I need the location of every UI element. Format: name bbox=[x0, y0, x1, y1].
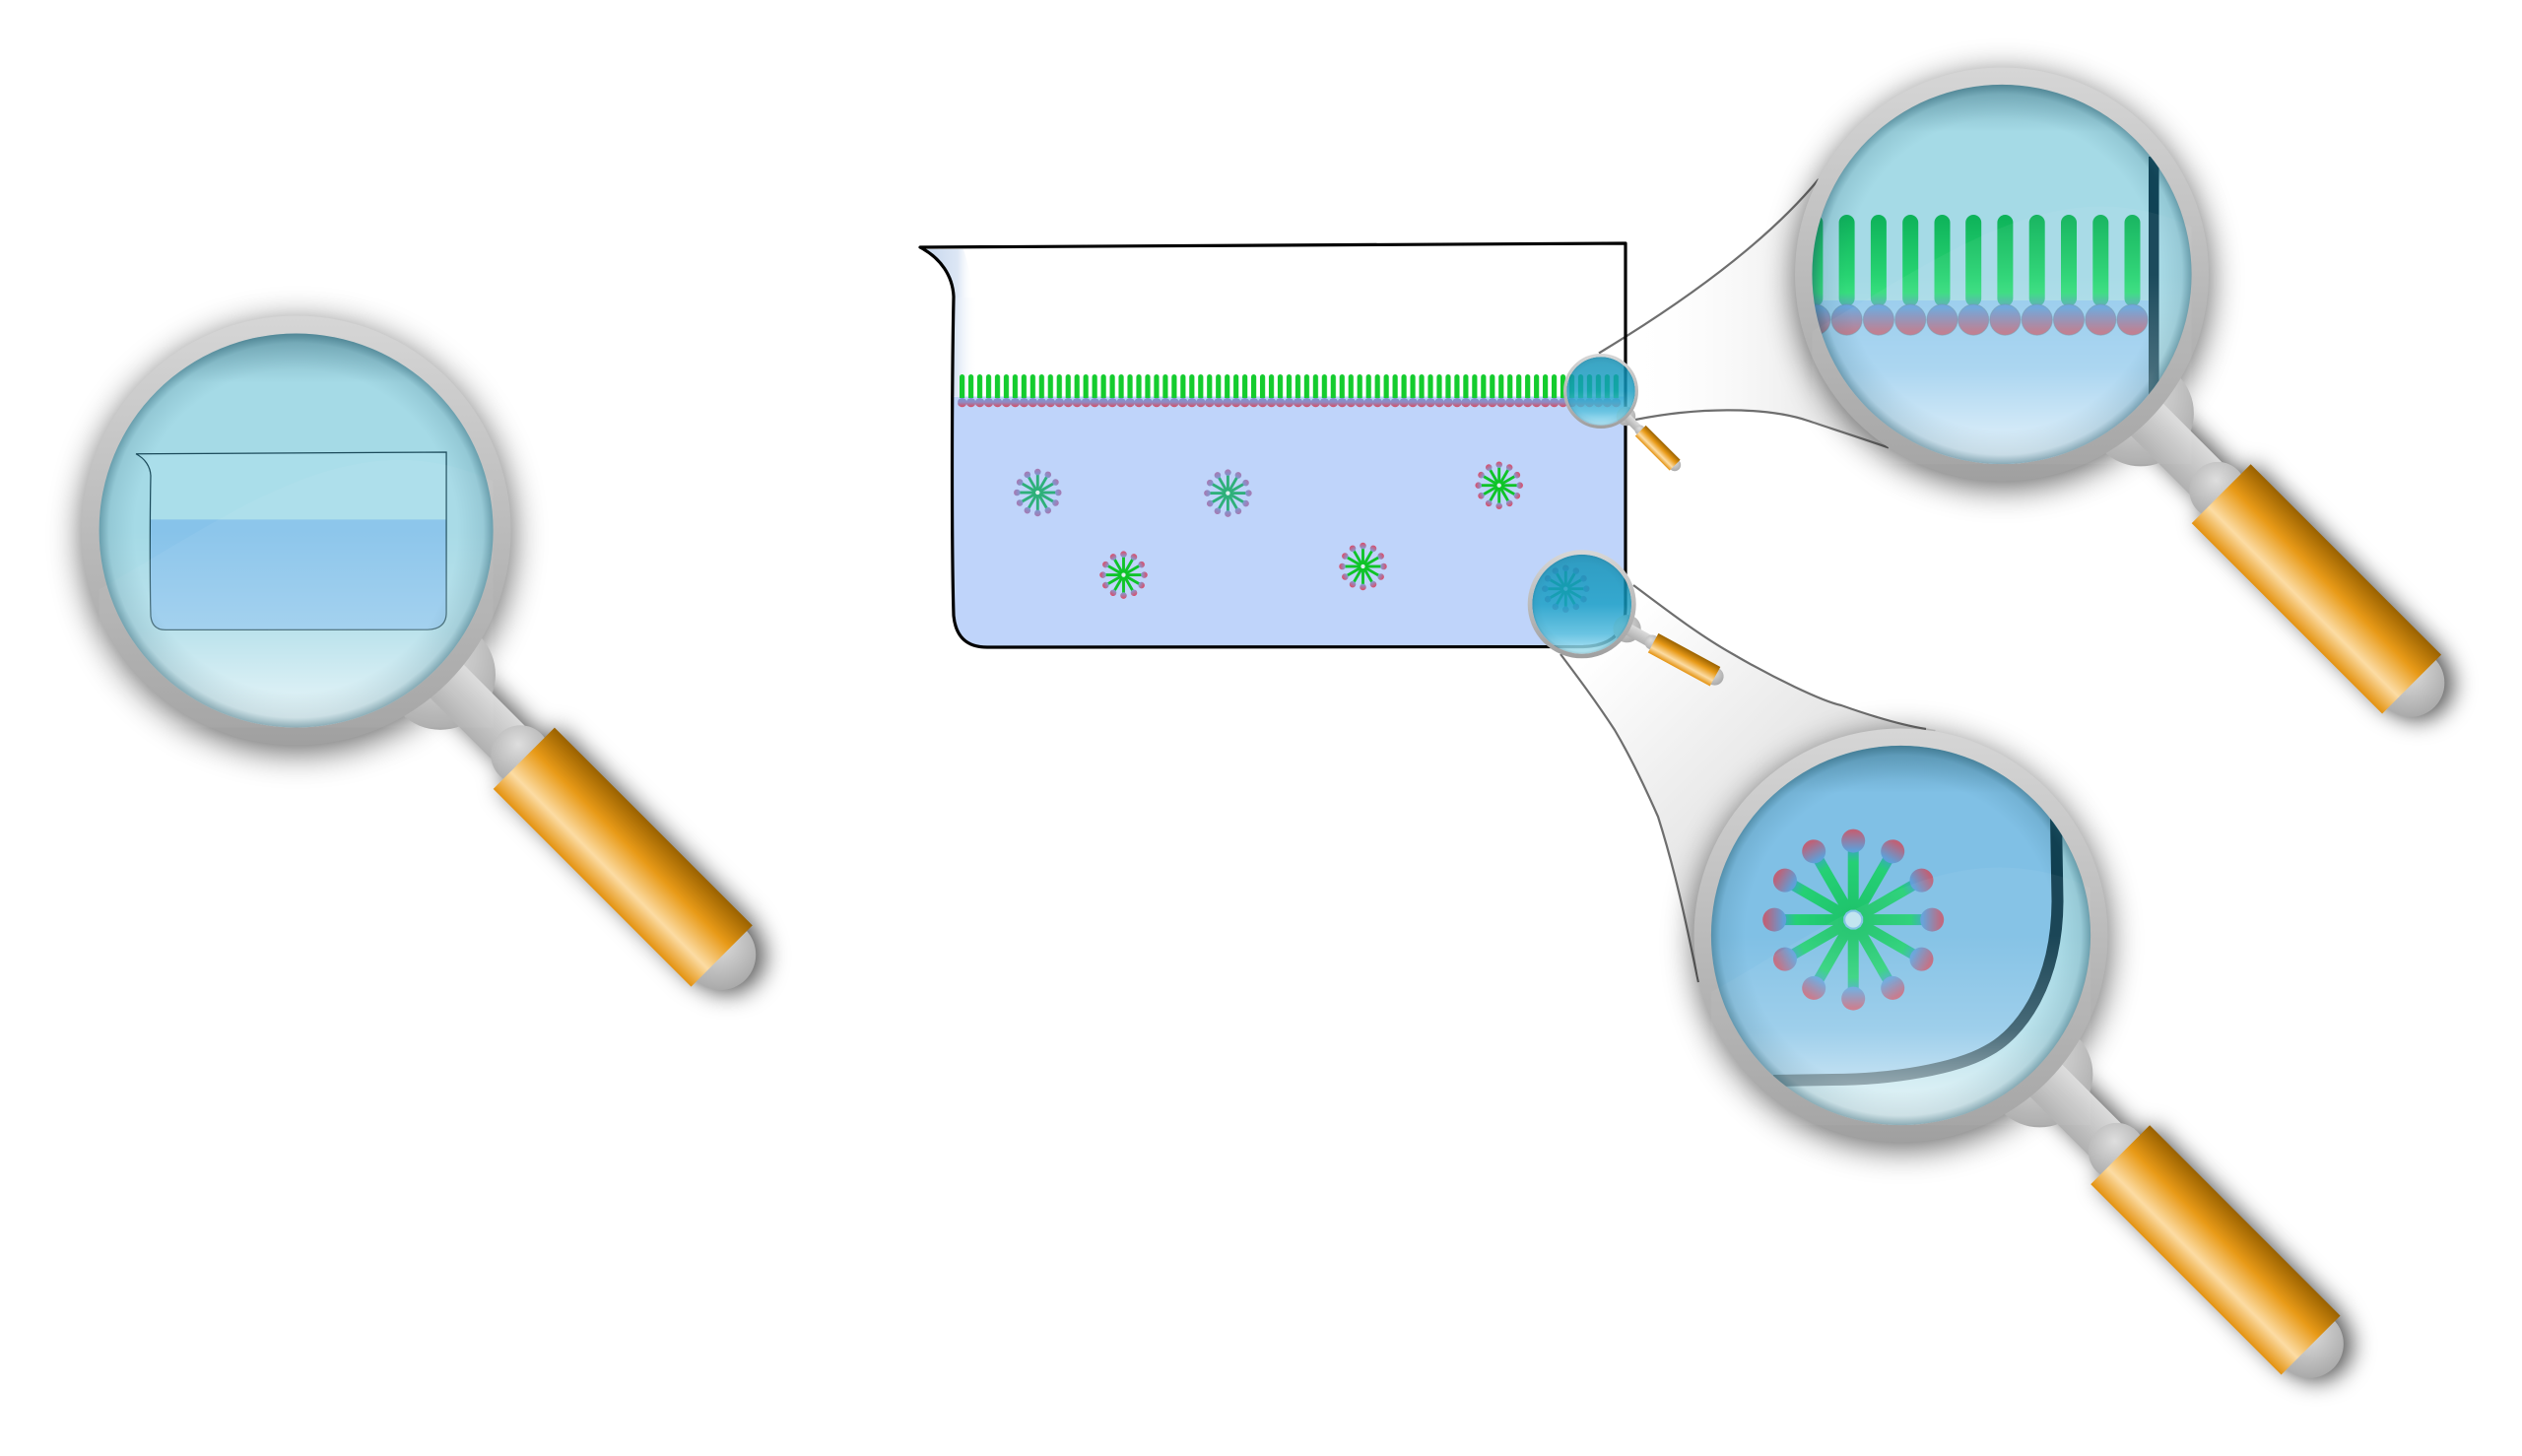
zoom cone outlines: surface view bbox=[1599, 179, 1889, 447]
large magnifier: surface monolayer bbox=[1795, 67, 2472, 745]
beaker bbox=[920, 243, 1626, 647]
lens content bbox=[1813, 85, 2191, 464]
small lens bbox=[1532, 555, 1631, 654]
handle bbox=[2066, 338, 2472, 745]
glass highlight on left wall bbox=[954, 298, 977, 396]
rim bbox=[82, 315, 511, 745]
lipid row bbox=[1800, 215, 2148, 335]
small rim bbox=[1530, 553, 1633, 656]
small magnifier over corner bbox=[1530, 553, 1735, 717]
micelle under small lens bbox=[1542, 564, 1590, 613]
large magnifier: whole beaker bbox=[82, 315, 784, 1019]
small lens bbox=[1566, 357, 1635, 426]
small handle bbox=[1603, 585, 1735, 717]
beaker outline bbox=[920, 243, 1626, 647]
micelle 2 bbox=[1204, 469, 1252, 517]
surface monolayer heads bbox=[958, 397, 1621, 408]
glass highlight on lip bbox=[922, 249, 973, 298]
glass shading bbox=[1812, 85, 2192, 464]
lens content bbox=[1704, 739, 2098, 1133]
water bbox=[952, 396, 1626, 647]
shadow bbox=[1695, 735, 2370, 1399]
handle bbox=[1964, 999, 2371, 1406]
small rim bbox=[1565, 356, 1636, 427]
beaker wall bbox=[2149, 157, 2159, 394]
surface monolayer tails bbox=[960, 374, 1622, 398]
micelle 1 bbox=[1014, 469, 1062, 516]
micelle 5 bbox=[1339, 543, 1387, 590]
beaker corner wall bbox=[1773, 818, 2057, 1081]
glass shading bbox=[1711, 746, 2091, 1125]
large magnifier: micelle bbox=[1694, 729, 2371, 1406]
rim bbox=[1795, 67, 2209, 481]
zoom cone: surface view bbox=[1599, 179, 1889, 447]
zoom cone: micelle view bbox=[1560, 585, 1936, 982]
magnified micelle bbox=[1762, 829, 1944, 1011]
shadow bbox=[83, 323, 783, 1012]
water in corner bbox=[1704, 739, 2057, 1081]
glass shading bbox=[100, 333, 494, 727]
water below surface bbox=[1803, 300, 2149, 473]
small magnifier over surface bbox=[1565, 356, 1686, 476]
mini beaker bbox=[136, 452, 446, 629]
rim bbox=[1694, 729, 2108, 1143]
small handle bbox=[1613, 403, 1686, 476]
micelle 3 bbox=[1475, 461, 1523, 509]
lens content bbox=[89, 325, 502, 739]
handle bbox=[363, 597, 784, 1019]
micelle 4 bbox=[1099, 551, 1148, 599]
shadow bbox=[1796, 74, 2471, 738]
zoom cone outlines: micelle view bbox=[1560, 585, 1926, 982]
